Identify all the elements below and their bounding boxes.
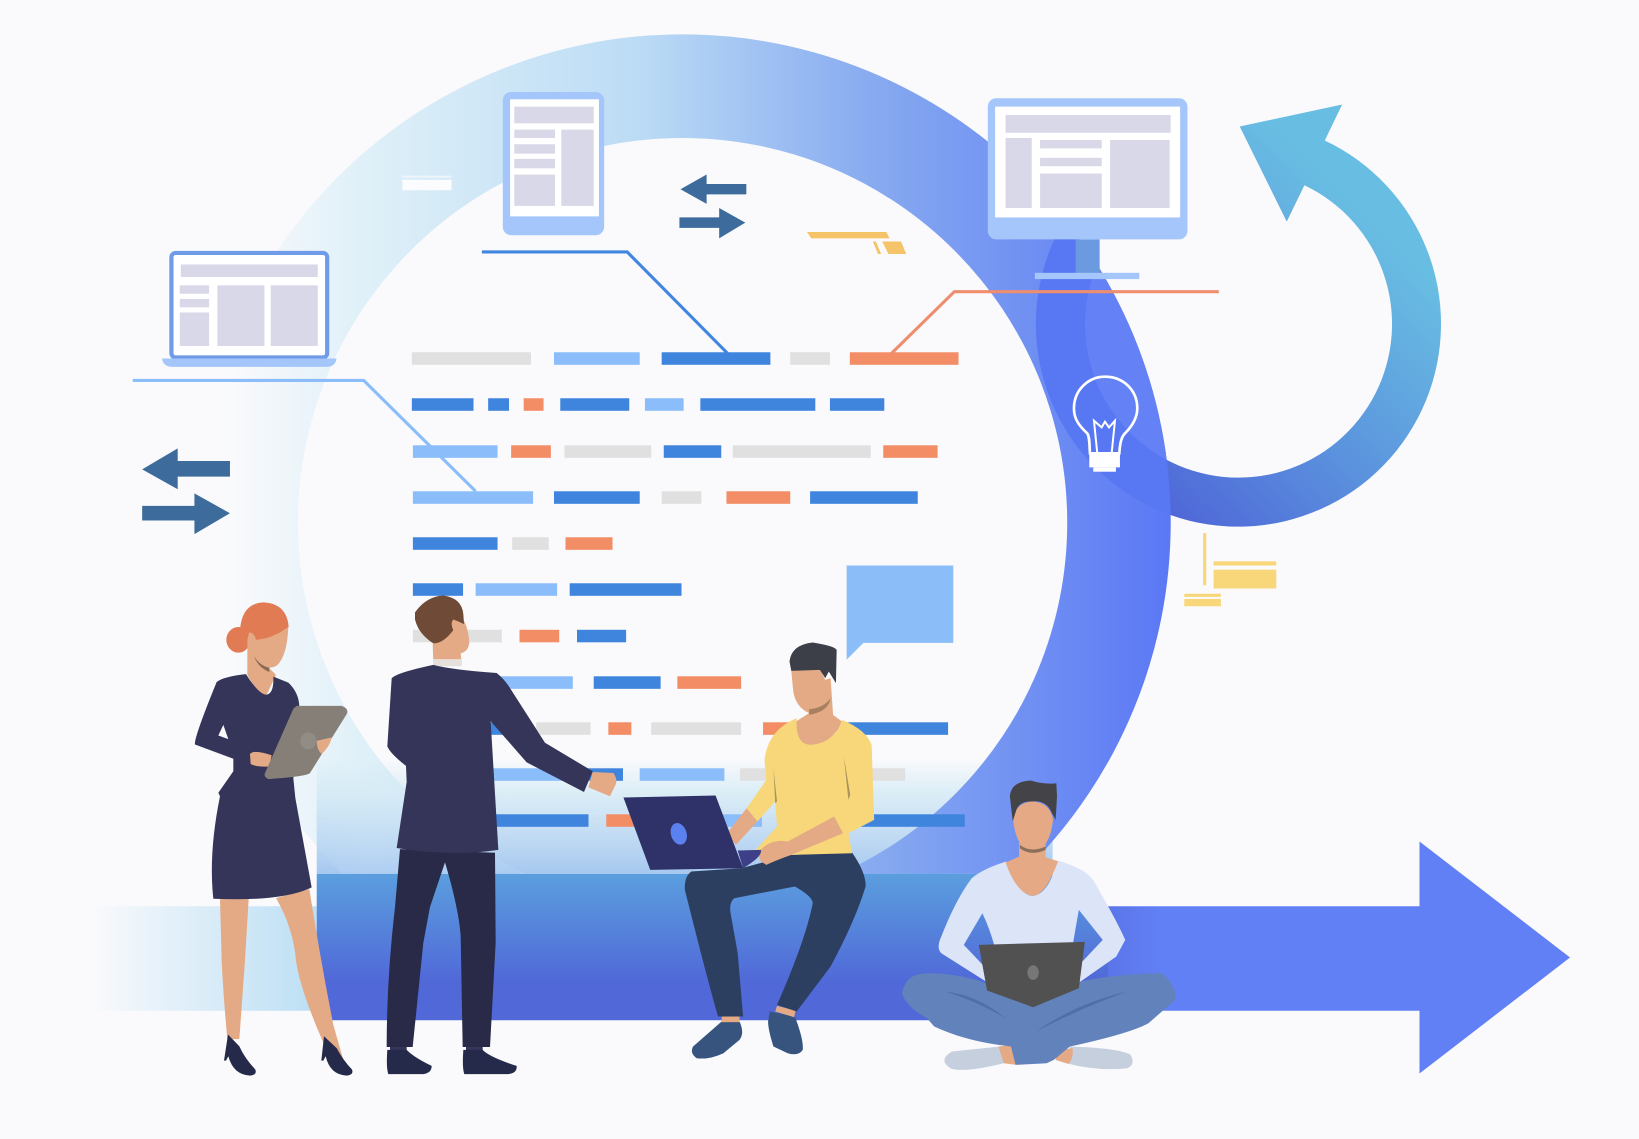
woman dress — [195, 674, 312, 899]
cross-legged man legs — [902, 973, 1175, 1065]
seated man laptop — [623, 796, 761, 870]
cross-legged man feet — [998, 1045, 1073, 1065]
cross-legged man laptop — [979, 942, 1085, 1007]
woman hands — [250, 752, 272, 767]
left fading band — [89, 906, 317, 1011]
connector line: laptop — [133, 380, 476, 491]
person: man with yellow shirt and laptop — [623, 643, 874, 1059]
connector line: tablet — [482, 252, 728, 353]
row 9 — [490, 722, 948, 735]
icon: laptop — [162, 253, 337, 367]
yellow flag bars — [807, 232, 906, 254]
row 8 — [491, 676, 741, 689]
arrows: left exchange — [142, 448, 230, 534]
row 5 — [413, 537, 613, 550]
seated man pants — [685, 853, 866, 1017]
speech bubble — [847, 565, 953, 660]
cross-legged man head — [1006, 781, 1058, 896]
row 10 — [490, 768, 905, 781]
row 7 — [413, 630, 626, 642]
seated man ankles — [722, 1006, 796, 1022]
yellow note bars — [1184, 533, 1276, 606]
man jacket — [387, 665, 593, 853]
glow above base band — [317, 758, 1053, 874]
woman shoes — [224, 1034, 352, 1076]
row 4 — [413, 491, 918, 504]
backlog bars — [412, 352, 965, 827]
row 3 — [413, 445, 938, 458]
man hand — [588, 772, 616, 796]
icon: monitor — [988, 98, 1187, 279]
cross-legged man shirt — [939, 861, 1125, 982]
large circular ring — [268, 34, 1171, 874]
woman legs — [220, 889, 345, 1066]
man head — [415, 596, 469, 666]
row 11 — [495, 814, 965, 827]
person: woman with tablet — [195, 602, 352, 1076]
man pants — [387, 849, 496, 1047]
seated man head — [790, 643, 842, 746]
seated man shoes — [692, 1012, 803, 1059]
connector line: monitor — [892, 292, 1219, 353]
seated man shirt — [747, 718, 874, 855]
small pale bar on ring — [402, 176, 452, 190]
cross-legged man socks — [944, 1047, 1133, 1070]
curved feedback arrow — [1164, 105, 1441, 527]
person: man in suit — [387, 596, 616, 1074]
icon: tablet — [503, 92, 604, 235]
seated man arms — [727, 808, 843, 865]
row 1 — [412, 352, 959, 365]
arrows: center exchange — [679, 175, 746, 238]
woman tablet — [265, 706, 347, 779]
man ankles — [390, 1046, 483, 1051]
person: man sitting cross-legged with laptop — [902, 781, 1175, 1070]
man shoes — [387, 1050, 517, 1074]
row 2 — [412, 398, 884, 411]
woman head — [226, 602, 289, 702]
base band — [317, 874, 1108, 1020]
forward arrow — [1045, 841, 1570, 1074]
row 6 — [413, 583, 682, 596]
icon: light bulb — [1074, 377, 1137, 472]
